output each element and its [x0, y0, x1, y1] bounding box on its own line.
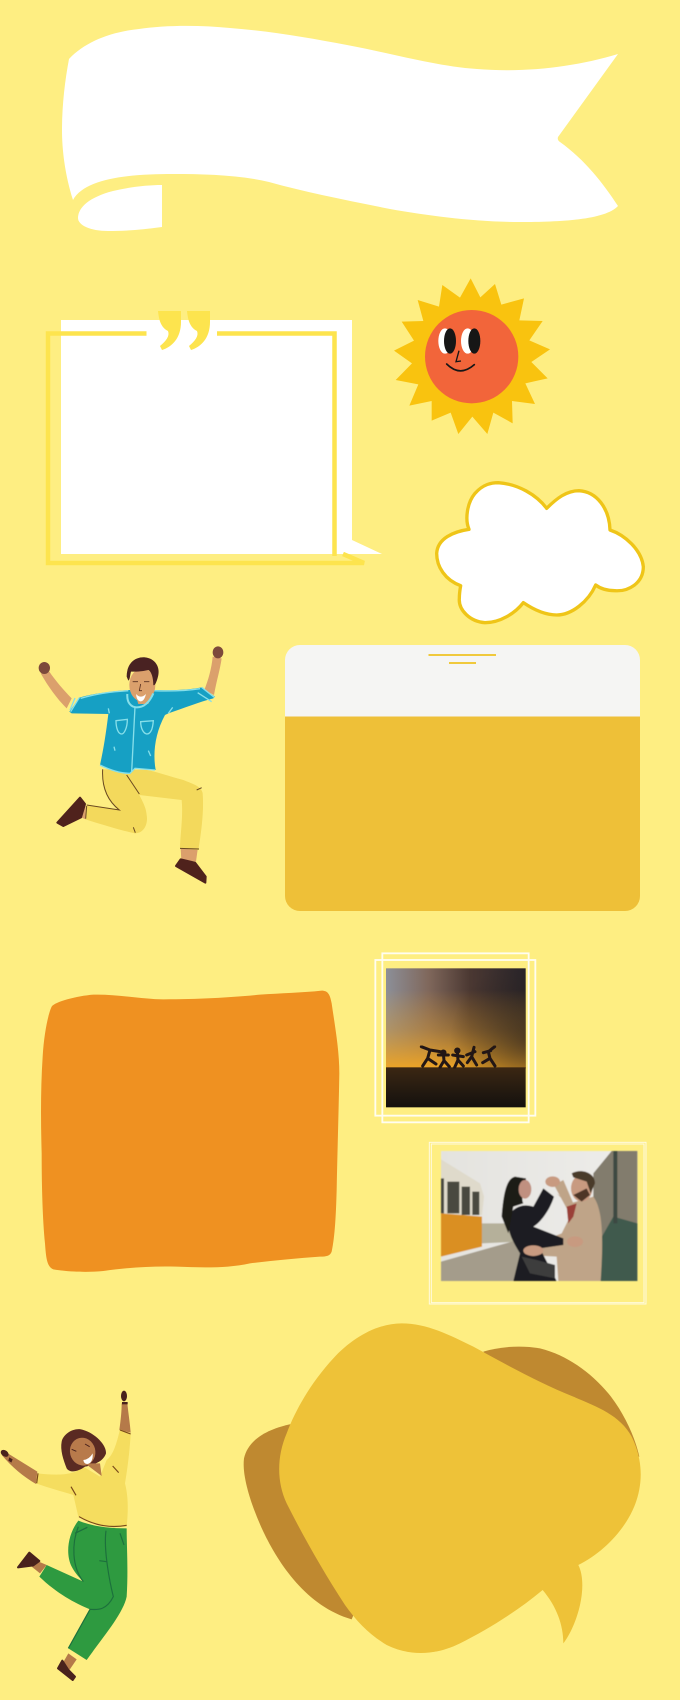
- header lines: [428, 655, 496, 663]
- illustration: jumping man: [39, 646, 223, 883]
- panel: orange hand-drawn square: [41, 991, 339, 1272]
- building and lamp: [593, 1151, 637, 1281]
- quote box outline: [48, 334, 364, 563]
- woman figure: [508, 1188, 563, 1281]
- quote box panel: [48, 311, 382, 563]
- man shirt: [69, 687, 215, 774]
- hands: [545, 1176, 560, 1187]
- panel: yellow card with white header: [285, 645, 640, 911]
- icon: smiling sun: [394, 278, 550, 434]
- man ankles: [79, 803, 198, 862]
- man fists: [39, 646, 223, 674]
- street: [441, 1239, 520, 1281]
- woman hands and bracelets: [0, 1391, 128, 1463]
- panel header: [285, 645, 640, 716]
- ribbon fold: [78, 185, 162, 231]
- bubble body: [279, 1323, 641, 1653]
- man arms: [41, 657, 222, 708]
- panel body: [285, 716, 640, 911]
- bag: [522, 1257, 555, 1278]
- woman ankles: [32, 1560, 77, 1672]
- photo: couple dancing with white frame: [429, 1142, 646, 1304]
- photo: sunset silhouettes with white frame: [375, 953, 535, 1122]
- woman sweater: [36, 1429, 131, 1527]
- sunset ground: [386, 1067, 526, 1107]
- man figure: [523, 1193, 602, 1281]
- woman trousers: [39, 1521, 127, 1660]
- man shoes: [57, 798, 206, 883]
- man collar: [127, 693, 153, 707]
- woman shoes: [18, 1553, 75, 1680]
- cloud shape: [437, 483, 643, 623]
- icon: quotation marks: [158, 311, 210, 350]
- speech bubble: [244, 1323, 641, 1653]
- couple photo scene: [441, 1151, 637, 1281]
- woman arms: [2, 1403, 131, 1484]
- tram: [441, 1159, 484, 1215]
- illustration: jumping woman: [0, 1391, 131, 1680]
- man head: [127, 657, 159, 704]
- sunset sky: [386, 968, 526, 1068]
- couple frame: [429, 1142, 646, 1304]
- ribbon banner: [62, 26, 618, 231]
- ribbon body: [62, 26, 618, 222]
- sunset frame: [375, 953, 535, 1122]
- bubble shadow: [244, 1347, 639, 1619]
- quote box white card: [61, 320, 382, 554]
- man trousers: [86, 769, 203, 850]
- woman head: [61, 1429, 106, 1476]
- jumping silhouettes: [421, 1047, 495, 1067]
